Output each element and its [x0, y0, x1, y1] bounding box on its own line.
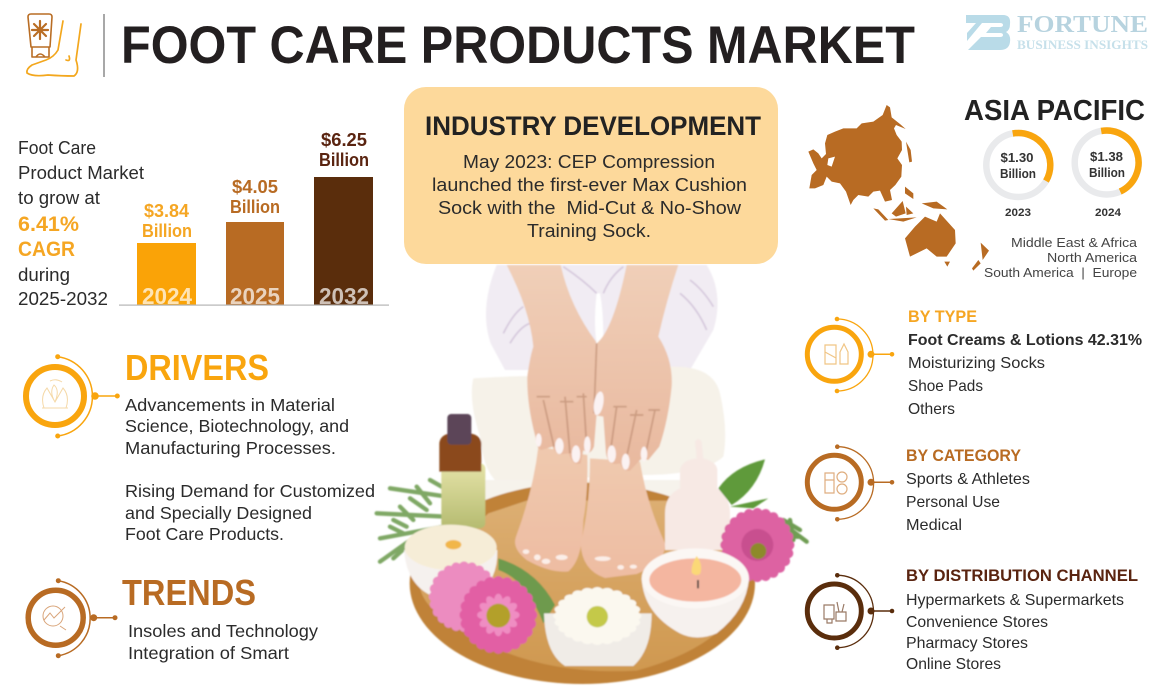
bar 2032: 2032 — [319, 283, 369, 309]
list: by category: Medical — [906, 517, 962, 534]
list: by distribution channel: Hypermarkets & Supermarkets — [906, 592, 1124, 609]
icon: trends — [28, 578, 118, 658]
green leaf — [718, 459, 768, 508]
title: FOOT CARE PRODUCTS MARKET — [121, 16, 915, 75]
list: by type — [908, 307, 1142, 418]
list: by category — [906, 446, 1030, 534]
market growth text block: Product Market — [18, 163, 144, 183]
bar 2032 — [314, 130, 373, 309]
right arm and hand — [593, 265, 678, 471]
heading: trends: TRENDS — [122, 572, 256, 613]
market growth text block: Foot Care — [18, 138, 96, 158]
white bowl with flower — [543, 581, 652, 666]
industry development callout: Sock with the Mid-Cut & No-Show — [438, 197, 742, 218]
drivers text: and Specially Designed — [125, 503, 312, 523]
drivers text: Manufacturing Processes. — [125, 438, 336, 458]
drivers text: Advancements in Material — [125, 395, 335, 415]
logo: Fortune Business Insights: FORTUNE — [1017, 12, 1148, 38]
donut: 2023 — [986, 133, 1050, 219]
drivers text — [125, 395, 375, 544]
other regions list: North America — [1047, 250, 1138, 265]
logo: Fortune Business Insights: BUSINESS INSIGHTS — [1017, 37, 1148, 52]
bar 2025: 2025 — [230, 283, 280, 309]
market growth text block: 2025-2032 — [18, 289, 108, 309]
industry development callout: launched the first-ever Max Cushion — [432, 174, 747, 195]
bar 2024: 2024 — [142, 283, 192, 309]
pink flower back — [421, 553, 507, 640]
list: by type: BY TYPE — [908, 307, 977, 326]
donut: 2024 — [1075, 130, 1139, 219]
bar 2024: Billion — [142, 221, 192, 241]
heading: drivers: DRIVERS — [125, 347, 269, 388]
bar 2024 — [137, 201, 196, 309]
list: by type: Moisturizing Socks — [908, 355, 1045, 372]
left arm and hand — [507, 265, 598, 464]
wooden tray — [410, 483, 755, 684]
heading: Asia Pacific: ASIA PACIFIC — [964, 95, 1145, 127]
amber oil bottle — [439, 414, 485, 528]
list: by type: Others — [908, 401, 955, 418]
fingernails — [536, 391, 647, 470]
white bowl with salt — [404, 525, 497, 595]
drivers text: Rising Demand for Customized — [125, 481, 375, 501]
white lotion bottle — [665, 439, 730, 550]
icon: by distribution channel — [807, 573, 894, 650]
list: by type: Shoe Pads — [908, 378, 983, 395]
industry development callout: INDUSTRY DEVELOPMENT — [425, 111, 761, 141]
aloe leaf — [498, 558, 555, 623]
right foot — [581, 458, 665, 578]
list: by category: Personal Use — [906, 494, 1000, 511]
other regions list: Middle East & Africa — [1011, 235, 1138, 250]
bar 2025 — [226, 177, 284, 309]
header icon: cream tube and foot — [27, 14, 81, 76]
list: by category: Sports & Athletes — [906, 471, 1030, 488]
bar 2024: $3.84 — [144, 201, 189, 221]
donut: 2024: $1.38 — [1090, 150, 1123, 164]
bar 2025: Billion — [230, 197, 280, 217]
herbs left — [377, 480, 447, 562]
icon: by type — [807, 317, 894, 393]
industry development callout — [404, 87, 778, 264]
list: by type: Foot Creams & Lotions 42.31% — [908, 332, 1142, 349]
list: by distribution channel: BY DISTRIBUTION CHANNEL — [906, 566, 1138, 585]
market growth text block: to grow at — [18, 188, 100, 208]
other regions list — [984, 235, 1138, 280]
bar 2032: Billion — [319, 150, 369, 170]
drivers text: Science, Biotechnology, and — [125, 416, 349, 436]
towel cloth under feet — [483, 480, 683, 507]
header divider — [103, 14, 105, 77]
white trousers — [486, 265, 718, 370]
donut: 2023: Billion — [1000, 167, 1036, 181]
donut: 2024: 2024 — [1095, 207, 1122, 219]
market growth text block: during — [18, 265, 70, 285]
rolled towel — [472, 367, 725, 482]
donut: 2024: Billion — [1089, 166, 1125, 180]
other regions list: South America | Europe — [984, 265, 1137, 280]
donut: 2023: $1.30 — [1000, 151, 1034, 165]
industry development callout: Training Sock. — [527, 220, 651, 241]
trends text — [128, 621, 318, 663]
list: by distribution channel: Convenience Stores — [906, 614, 1048, 631]
trends text: Integration of Smart — [128, 643, 289, 663]
map: Asia Pacific — [808, 105, 989, 271]
candle bowl — [642, 548, 749, 637]
bar 2025: $4.05 — [232, 177, 278, 197]
central photo: foot care spa illustration — [377, 265, 807, 684]
market growth text block: CAGR — [18, 238, 75, 261]
industry development callout: May 2023: CEP Compression — [463, 151, 715, 172]
trends text: Insoles and Technology — [128, 621, 318, 641]
market growth text block: 6.41% — [18, 213, 79, 236]
icon: by category — [807, 444, 894, 522]
list: by category: BY CATEGORY — [906, 446, 1022, 465]
bar chart: market size — [119, 130, 389, 309]
drivers text: Foot Care Products. — [125, 524, 284, 544]
market growth text block — [18, 138, 144, 309]
left foot — [515, 447, 587, 572]
finger shading — [537, 343, 660, 460]
list: by distribution channel: Pharmacy Stores — [906, 635, 1028, 652]
list: by distribution channel: Online Stores — [906, 656, 1001, 673]
toenails — [523, 549, 637, 570]
pink flower right — [712, 500, 803, 590]
donut: 2023: 2023 — [1005, 207, 1031, 219]
icon: drivers — [26, 354, 120, 438]
bar 2032: $6.25 — [321, 130, 367, 150]
herbs right — [773, 517, 807, 542]
logo: Fortune Business Insights — [966, 12, 1148, 52]
list: by distribution channel — [906, 566, 1138, 673]
pink flower front — [451, 567, 546, 663]
